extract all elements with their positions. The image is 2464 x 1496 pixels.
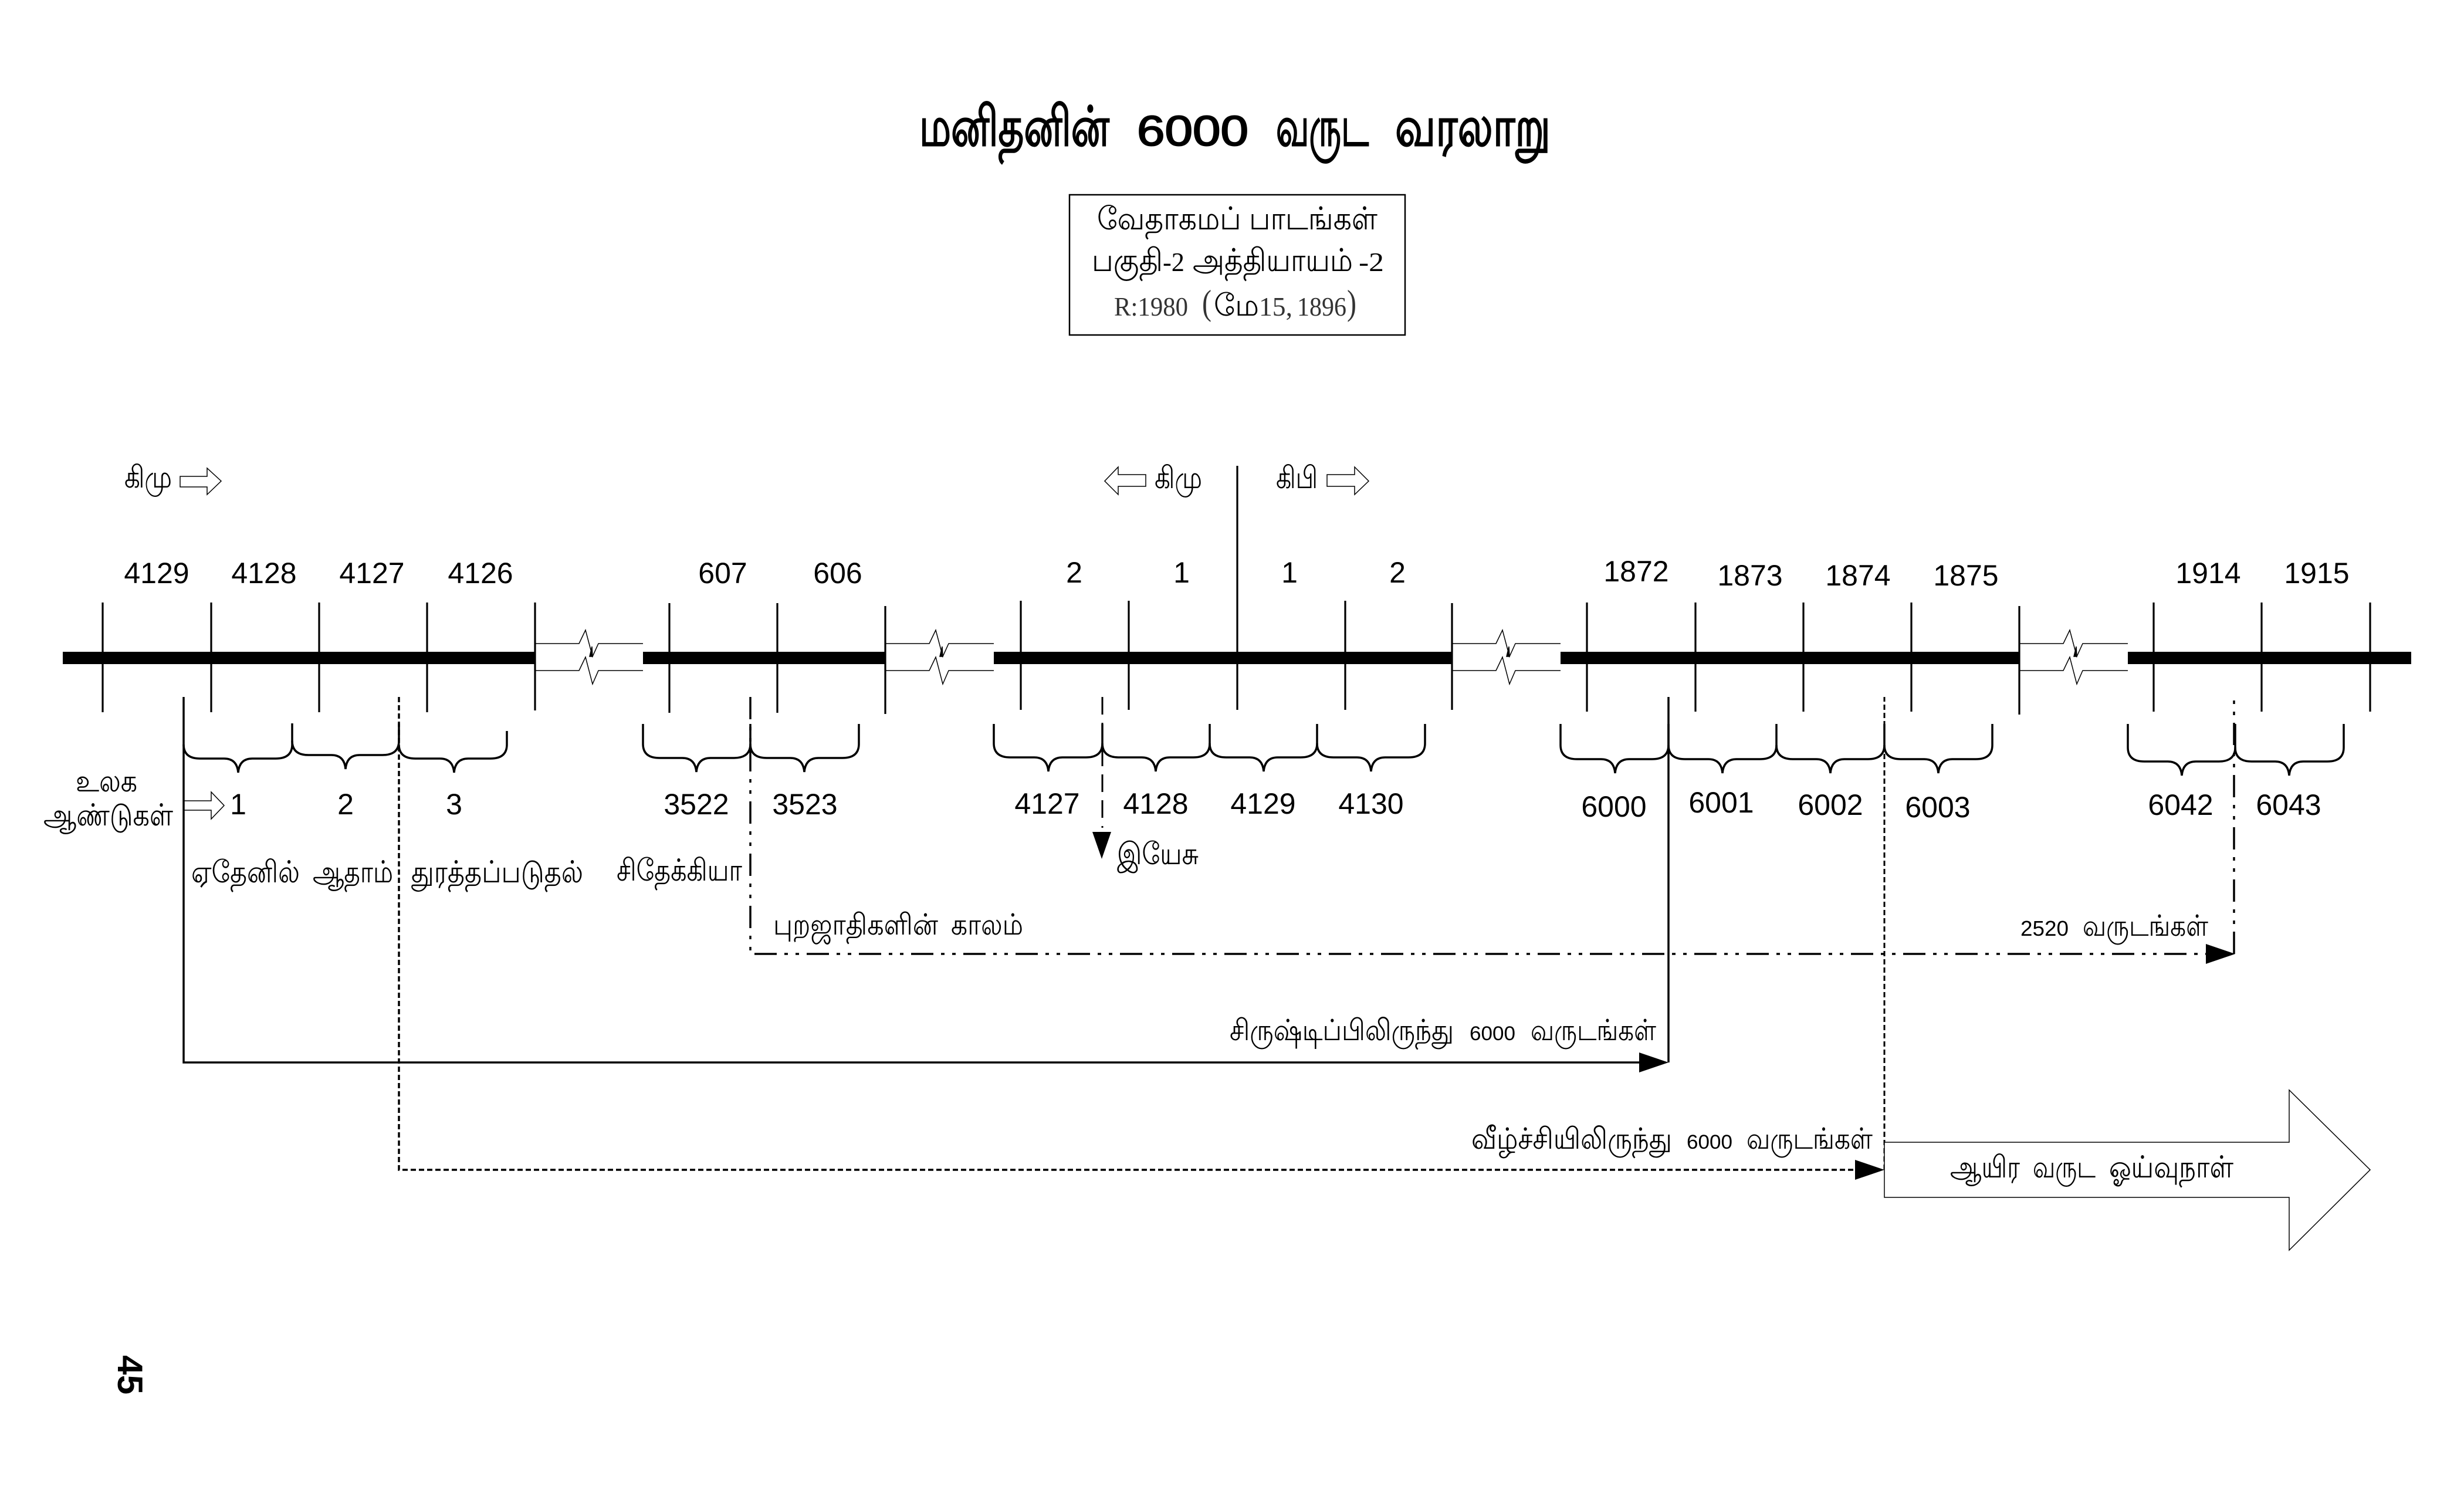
- timeline calendar years: 2: [1066, 556, 1082, 589]
- title: 6000: [1137, 108, 1248, 155]
- world years numbers: 6002: [1798, 788, 1863, 821]
- title: [919, 96, 1551, 165]
- arrow: thousand-year sabbath: [1884, 1090, 2370, 1250]
- timeline calendar years: 1915: [2284, 557, 2350, 590]
- BC label with left arrow: [1105, 461, 1202, 497]
- timeline calendar years: 1874: [1825, 559, 1891, 592]
- timeline calendar years: 1: [1281, 556, 1298, 589]
- BC label with right arrow: [124, 461, 221, 497]
- timeline calendar years: 4127: [339, 557, 405, 590]
- text: reprint reference: [1114, 283, 1356, 323]
- text: times of the Gentiles: காலம்: [951, 908, 1023, 941]
- page number: 45: [110, 1355, 150, 1395]
- text: 2520 years: வருடங்கள்: [2083, 909, 2208, 945]
- world years numbers: 4127: [1014, 787, 1080, 820]
- text: Adam in Eden: ஆதாம்: [313, 855, 393, 892]
- world years numbers: 4129: [1230, 787, 1296, 820]
- text: reprint reference: R:1980: [1114, 292, 1188, 321]
- timeline ticks: [103, 466, 2370, 715]
- world years numbers: [230, 786, 2321, 824]
- text: reprint reference: மே: [1214, 289, 1259, 323]
- world years numbers: 3523: [772, 788, 838, 821]
- BC label with left arrow: கிமு: [1155, 461, 1202, 497]
- text: times of the Gentiles: [773, 908, 1023, 945]
- timeline calendar years: 606: [813, 557, 862, 590]
- text: reprint reference: 15,: [1259, 292, 1292, 321]
- AD label with right arrow: கிபி: [1276, 461, 1318, 495]
- world years numbers: 4128: [1123, 787, 1189, 820]
- text: part and chapter: பகுதி: [1092, 243, 1163, 282]
- text: lesson series: வேதாகமப் பாடங்கள்: [1097, 201, 1377, 240]
- timeline break 4: [2019, 630, 2128, 684]
- title: வரலாறு: [1395, 96, 1551, 164]
- text: thousand-year rest day: [1950, 1150, 2233, 1187]
- timeline calendar years: 607: [698, 557, 747, 590]
- text: 2520 years: 2520: [2020, 916, 2069, 940]
- title: வருட: [1276, 96, 1369, 164]
- text: Adam in Eden: ஏதேனில்: [191, 855, 300, 892]
- text: part and chapter: [1092, 243, 1384, 282]
- timeline calendar years: 1873: [1717, 559, 1783, 592]
- world years numbers: 6001: [1688, 786, 1754, 819]
- timeline bars: [63, 652, 2411, 664]
- timeline calendar years: 2: [1389, 556, 1406, 589]
- text: 2520 years: [2020, 909, 2208, 945]
- timeline calendar years: 1875: [1933, 559, 1999, 592]
- text: Zedekiah: சிதேக்கியா: [617, 854, 742, 891]
- text: from the fall 6000 years: வருடங்கள்: [1747, 1122, 1873, 1157]
- timeline calendar years: 4126: [448, 557, 513, 590]
- text: thousand-year rest day: ஓய்வுநாள்: [2109, 1150, 2233, 1187]
- text: part and chapter: -2: [1359, 247, 1384, 277]
- timeline calendar years: 1914: [2175, 557, 2241, 590]
- text: expulsion: துரத்தப்படுதல்: [411, 855, 583, 892]
- timeline break 3: [1452, 630, 1561, 684]
- title: மனிதனின்: [919, 96, 1110, 165]
- text: from the fall 6000 years: [1471, 1122, 1873, 1159]
- text: times of the Gentiles: புறஜாதிகளின்: [773, 908, 938, 945]
- text: from creation 6000 years: வருடங்கள்: [1531, 1014, 1656, 1049]
- text: from creation 6000 years: [1230, 1014, 1656, 1050]
- text: from the fall 6000 years: வீழ்ச்சியிலிருந்து: [1471, 1122, 1672, 1159]
- text: reprint reference: (: [1202, 283, 1211, 322]
- BC label with right arrow: கிமு: [124, 461, 172, 497]
- text: reprint reference: ): [1347, 283, 1356, 322]
- timeline calendar years: 4128: [231, 557, 297, 590]
- braces: world years: [184, 723, 2344, 776]
- text: thousand-year rest day: வருட: [2033, 1150, 2096, 1187]
- panel: lesson reference box: [1069, 195, 1405, 335]
- text: thousand-year rest day: ஆயிர: [1950, 1150, 2020, 1186]
- world years numbers: 6043: [2256, 788, 2321, 821]
- text: Adam in Eden: [191, 855, 393, 892]
- world years numbers: 6000: [1581, 790, 1647, 823]
- world years numbers: 3: [446, 788, 462, 821]
- text: part and chapter: அத்தியாயம்: [1193, 243, 1353, 282]
- world years numbers: 4130: [1338, 787, 1404, 820]
- world years label with arrow: ஆண்டுகள்: [43, 798, 173, 834]
- text: from creation 6000 years: 6000: [1470, 1023, 1515, 1045]
- world years label with arrow: உலக: [76, 764, 137, 798]
- world years label with arrow: [43, 764, 224, 834]
- timeline calendar years: 4129: [124, 557, 189, 590]
- text: reprint reference: 1896: [1297, 292, 1346, 321]
- text: from the fall 6000 years: 6000: [1687, 1131, 1732, 1153]
- arrow: 6000 years from the fall: [399, 697, 1884, 1180]
- arrow: times of the Gentiles: [750, 697, 2235, 964]
- timeline break 1: [535, 630, 643, 684]
- text: part and chapter: -2: [1163, 247, 1184, 277]
- world years numbers: 3522: [664, 788, 729, 821]
- timeline break 2: [885, 630, 994, 684]
- text: from creation 6000 years: சிருஷ்டிப்பிலிருந்து: [1230, 1014, 1454, 1050]
- timeline calendar years: 1872: [1603, 555, 1669, 588]
- world years numbers: 6042: [2148, 788, 2213, 821]
- AD label with right arrow: [1276, 461, 1369, 495]
- arrow: 6000 years from creation: [184, 697, 1668, 1072]
- world years numbers: 1: [230, 788, 246, 821]
- timeline calendar years: [124, 555, 2350, 592]
- world years numbers: 2: [337, 788, 354, 821]
- arrow: Jesus marker: [1092, 697, 1199, 873]
- world years numbers: 6003: [1905, 791, 1971, 824]
- timeline calendar years: 1: [1173, 556, 1190, 589]
- text: Jesus: இயேசு: [1117, 837, 1199, 873]
